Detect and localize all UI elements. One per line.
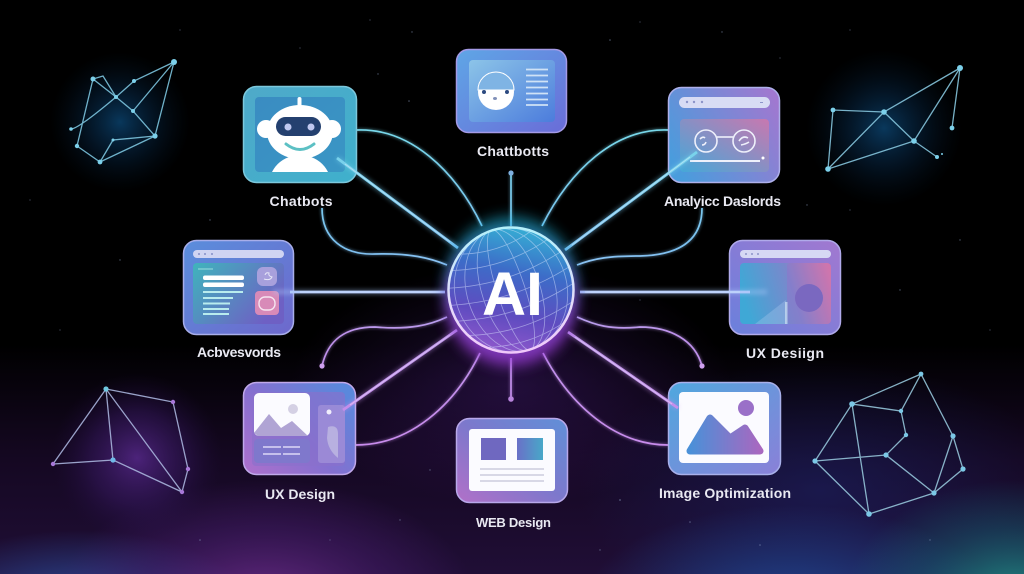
curved connector glow	[322, 130, 702, 445]
icon: layout illustration	[755, 263, 831, 324]
label: UX Desiign: UX Desiign	[746, 345, 824, 361]
label: UX Design: UX Design	[265, 486, 335, 502]
card: Analytics dashboards	[668, 88, 780, 182]
AI text: AI	[482, 260, 543, 328]
icon: analytics chart	[690, 130, 764, 161]
AI sphere	[433, 211, 589, 369]
constellation: top left	[69, 59, 177, 164]
label: WEB Design: WEB Design	[476, 515, 551, 530]
label: Chatbots: Chatbots	[270, 193, 333, 209]
text panel	[254, 439, 310, 463]
card: Chatbots	[244, 86, 356, 182]
card: Chattbotts	[456, 50, 566, 132]
glowing straight connectors	[273, 152, 767, 410]
icon: face	[478, 72, 514, 110]
icon: robot	[257, 97, 341, 172]
card: Image Optimization	[668, 382, 780, 474]
icon: mountains and sun	[690, 400, 760, 451]
constellation: bottom right	[812, 372, 966, 517]
connector end dots	[319, 170, 705, 402]
label: Chattbotts: Chattbotts	[477, 143, 549, 159]
card: Acbvesvords	[184, 240, 294, 334]
card: WEB Design	[456, 418, 568, 502]
constellation: bottom left	[51, 386, 190, 494]
side panel	[318, 405, 345, 463]
icon: text lines	[198, 268, 244, 315]
icon: picture	[254, 393, 310, 436]
card: UX Design left	[244, 382, 356, 474]
sphere grid	[450, 228, 572, 351]
label: Analyicc Daslords: Analyicc Daslords	[664, 193, 781, 209]
label: Acbvesvords: Acbvesvords	[197, 344, 281, 360]
constellation: top right	[825, 65, 963, 172]
curved connectors	[322, 130, 702, 445]
card: UX Desiign right	[730, 240, 840, 334]
icon: app tiles	[255, 267, 279, 315]
icon: text lines	[526, 70, 548, 105]
label: Image Optimization: Image Optimization	[659, 485, 791, 501]
